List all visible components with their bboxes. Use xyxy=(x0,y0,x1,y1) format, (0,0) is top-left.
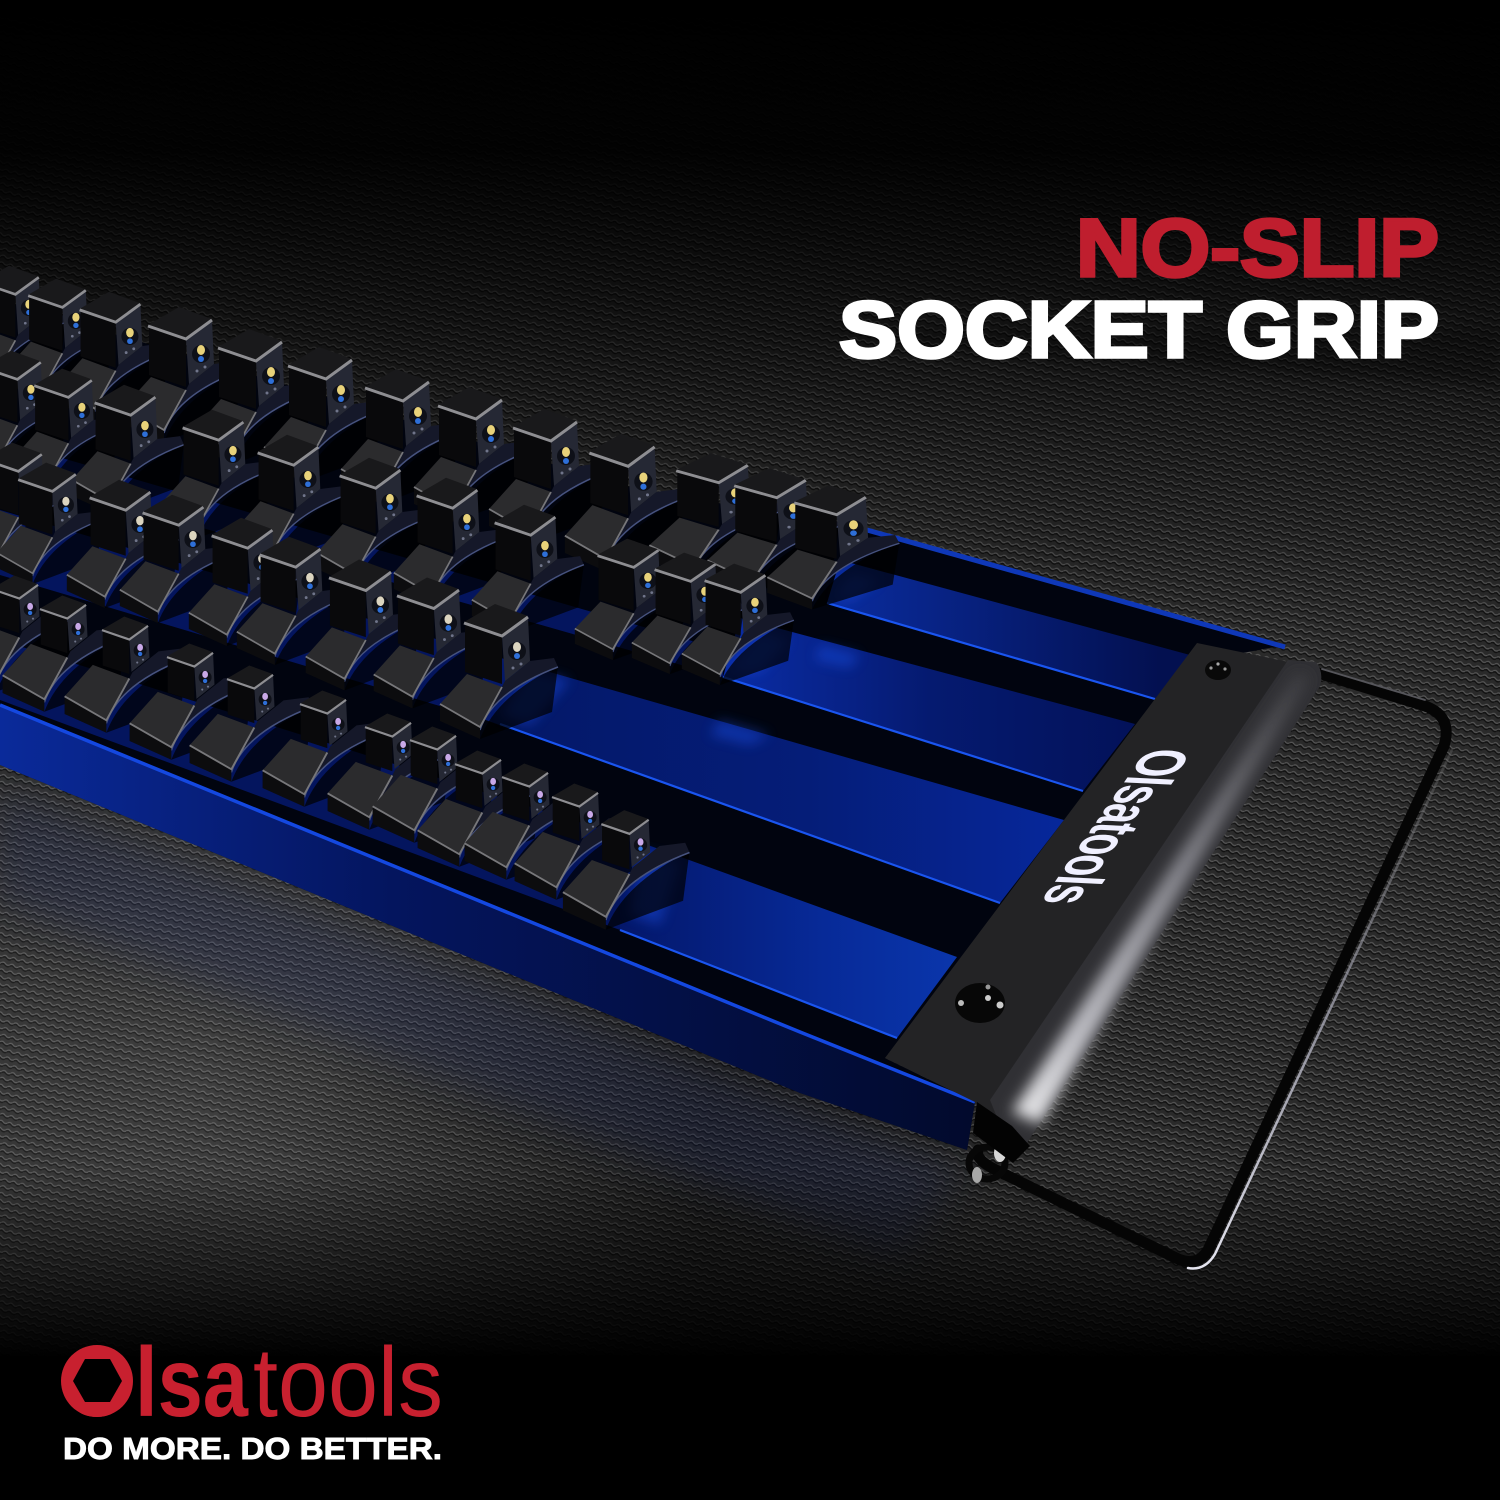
headline: white line: SOCKET GRIP xyxy=(839,285,1439,374)
socket clips: second row xyxy=(0,351,794,685)
wire handle xyxy=(969,669,1452,1268)
logo: hex O background xyxy=(61,1345,133,1417)
channel 4 xyxy=(620,835,957,1038)
channel 3 xyxy=(480,652,1064,903)
headline: red line: NO-SLIP xyxy=(1076,203,1439,294)
wire hook xyxy=(969,1144,1006,1183)
logo: wordmark bold: lsa xyxy=(135,1327,249,1437)
socket clips: back row xyxy=(0,266,899,609)
bracket end cap xyxy=(973,1102,1030,1163)
channel sheen xyxy=(500,575,880,925)
bracket plate xyxy=(885,643,1318,1143)
socket clips: front row xyxy=(0,575,690,930)
logo: hex counter xyxy=(73,1359,122,1402)
bracket roller xyxy=(990,660,1321,1143)
logo: O letter: O xyxy=(62,1327,132,1437)
tray outer lower rim xyxy=(0,705,975,1150)
tagline: DO MORE. DO BETTER. xyxy=(63,1431,442,1466)
screw: upper xyxy=(1205,660,1231,680)
end bracket xyxy=(885,643,1321,1163)
brand logo xyxy=(61,1327,443,1466)
socket clips: third row xyxy=(0,443,558,739)
channel bright edges xyxy=(500,603,1155,1038)
screw: lower xyxy=(955,983,1005,1023)
top rim highlight xyxy=(867,530,1285,647)
headline xyxy=(839,203,1439,374)
logo: wordmark light: tools xyxy=(253,1327,443,1437)
channels behind sockets xyxy=(0,440,723,930)
socket tray: blue aluminium rail xyxy=(0,300,1285,1150)
bracket logo text: Olsatools xyxy=(1026,747,1207,906)
roller highlight xyxy=(1012,672,1310,1124)
channel 1 xyxy=(827,560,1190,699)
channel 2 xyxy=(723,618,1135,791)
